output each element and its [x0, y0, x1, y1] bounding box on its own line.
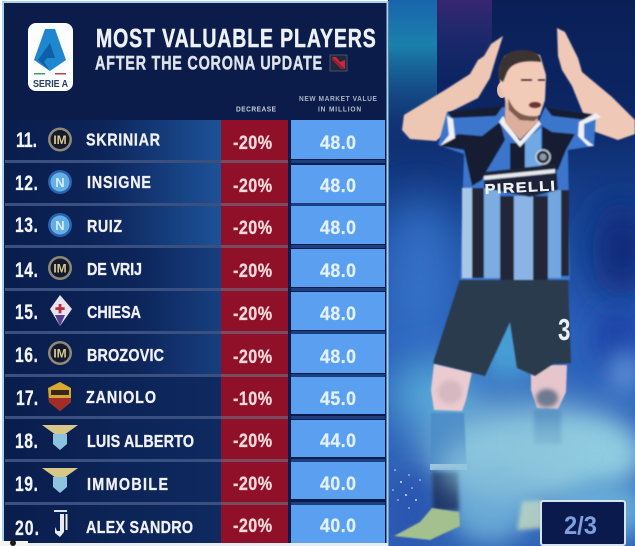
row 17: Zaniolo: -10%: [233, 388, 272, 409]
head: [497, 50, 546, 140]
icon: Juventus crest: [54, 510, 68, 537]
row 14: De Vrij: -20%: [233, 260, 272, 281]
row 12: Insigne: 48.0: [320, 174, 356, 196]
row 12: Insigne: [5, 163, 385, 203]
row 15: Chiesa: [5, 291, 385, 331]
row 12: Insigne: INSIGNE: [87, 174, 151, 192]
column header: decrease: DECREASE: [236, 106, 276, 114]
row 16: Brozovic: 16.: [15, 343, 38, 367]
back leg and shoe: [517, 365, 567, 530]
row 14: De Vrij: 14.: [15, 258, 38, 282]
row 11: Skriniar: SKRINIAR: [86, 131, 160, 150]
row 11: Skriniar: 11.: [16, 128, 37, 152]
row 16: Brozovic: 48.0: [320, 345, 356, 367]
icon: decrease arrow: [330, 55, 347, 71]
icon: Inter crest: IM: [53, 346, 67, 360]
row 20: Alex Sandro: -20%: [233, 515, 272, 536]
icon: Inter crest: IM: [53, 262, 67, 276]
icon: Roma crest: [48, 382, 71, 411]
row 20: Alex Sandro: [5, 505, 385, 543]
subtitle: AFTER THE CORONA UPDATE: [95, 51, 322, 74]
row 17: Zaniolo: 45.0: [320, 387, 356, 409]
row 17: Zaniolo: [5, 377, 385, 416]
row 17: Zaniolo: ZANIOLO: [86, 389, 156, 407]
row 13: Ruiz: -20%: [233, 217, 272, 238]
row 19: Immobile: IMMOBILE: [87, 476, 168, 494]
right arm: [557, 28, 635, 140]
icon: Fiorentina crest: [50, 295, 72, 326]
row 18: Luis Alberto: [5, 419, 385, 459]
icon: Lazio crest: [42, 425, 78, 450]
row 12: Insigne: 12.: [15, 171, 38, 195]
row 14: De Vrij: 48.0: [320, 259, 356, 281]
row 18: Luis Alberto: LUIS ALBERTO: [87, 433, 194, 451]
row 13: Ruiz: 13.: [15, 213, 38, 237]
background: photo panel: [384, 0, 635, 546]
shorts: 3: [558, 312, 570, 347]
row 13: Ruiz: RUIZ: [87, 218, 122, 236]
row 12: Insigne: -20%: [233, 175, 272, 196]
row 16: Brozovic: BROZOVIC: [87, 347, 164, 365]
row 11: Skriniar: 48.0: [320, 131, 356, 153]
row 20: Alex Sandro: 20.: [15, 516, 39, 540]
icon: Inter crest: IM: [53, 133, 67, 147]
icon: Inter crest: [48, 256, 72, 280]
row 14: De Vrij: DE VRIJ: [87, 261, 142, 279]
column header: new market value: IN MILLION: [318, 106, 361, 114]
icon: Napoli crest: [48, 170, 72, 194]
row 17: Zaniolo: 17.: [16, 386, 38, 410]
title: MOST VALUABLE PLAYERS: [96, 23, 376, 53]
league logo: Serie A: SERIE A: [33, 79, 68, 90]
jersey: [438, 106, 601, 280]
row 16: Brozovic: [5, 334, 385, 374]
row 19: Immobile: -20%: [233, 473, 272, 494]
row 11: Skriniar: -20%: [233, 132, 272, 153]
column header: new market value: [299, 96, 377, 114]
player illustration: [394, 28, 635, 540]
front leg and shoe: [394, 364, 472, 540]
row 11: Skriniar: [5, 120, 385, 160]
icon: Lazio crest: [42, 468, 78, 493]
row 14: De Vrij: [5, 248, 385, 288]
lower stripes: [462, 188, 472, 278]
row 13: Ruiz: [5, 206, 385, 245]
row 15: Chiesa: CHIESA: [87, 304, 141, 322]
row 15: Chiesa: 15.: [15, 300, 38, 324]
icon: Napoli crest: N: [55, 218, 65, 233]
jersey sponsor: PIRELLI: [484, 178, 555, 198]
column header: new market value: NEW MARKET VALUE: [299, 96, 377, 103]
row 13: Ruiz: 48.0: [320, 216, 356, 238]
row 19: Immobile: [5, 462, 385, 502]
left arm: [402, 36, 503, 141]
row 19: Immobile: 19.: [15, 472, 38, 496]
icon: Inter crest: [48, 341, 72, 365]
icon: Inter crest: [48, 128, 72, 152]
row 19: Immobile: 40.0: [320, 472, 356, 494]
shorts: [433, 279, 571, 376]
row separators: [5, 160, 385, 505]
row 18: Luis Alberto: 44.0: [320, 429, 356, 451]
ranking panel: [3, 2, 388, 546]
row 18: Luis Alberto: -20%: [233, 430, 272, 451]
sleeve and shoulder dark areas: [447, 106, 503, 118]
league logo: Serie A: [28, 23, 73, 91]
row 20: Alex Sandro: 40.0: [320, 514, 356, 536]
bottom edge strip: [0, 540, 388, 546]
row 20: Alex Sandro: ALEX SANDRO: [86, 519, 193, 537]
page indicator box: 2/3: [564, 512, 597, 540]
row 15: Chiesa: -20%: [233, 303, 272, 324]
fog over legs: [440, 426, 584, 500]
row 15: Chiesa: 48.0: [320, 302, 356, 324]
page indicator box: [541, 501, 625, 545]
icon: Napoli crest: N: [55, 175, 65, 190]
icon: Napoli crest: [48, 213, 72, 237]
row 18: Luis Alberto: 18.: [15, 429, 38, 453]
row 16: Brozovic: -20%: [233, 346, 272, 367]
icon: Fiorentina crest: ✚: [55, 302, 65, 316]
